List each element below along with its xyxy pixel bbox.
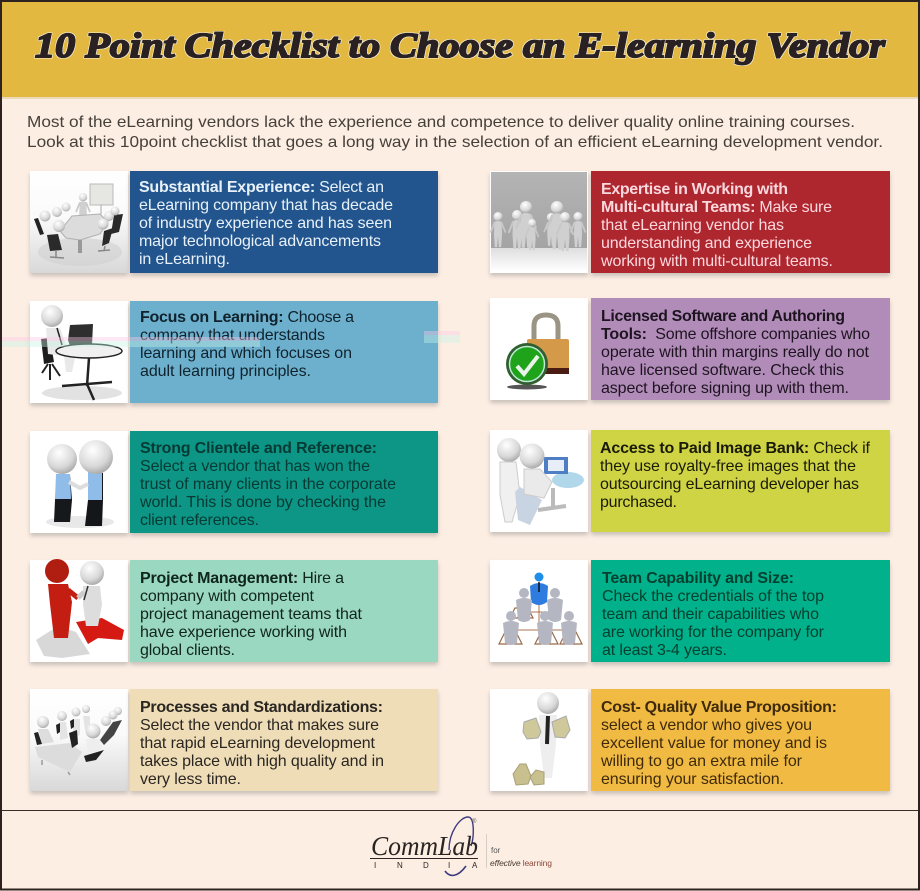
footer logo: I: [374, 861, 376, 870]
panel: team capability: [490, 560, 890, 662]
icon: handshake: [30, 431, 128, 533]
text box: company with competent: [140, 588, 315, 605]
text box: very less time.: [140, 771, 241, 788]
text box: Substantial Experience: Select an: [139, 179, 384, 196]
panel: processes and standardizations: [30, 689, 438, 791]
intro text: Most of the eLearning vendors lack the experience and competence to deliver quality online training courses.: [27, 114, 855, 131]
footer logo: I: [448, 861, 450, 870]
text box: Team Capability and Size:: [602, 570, 794, 587]
text box: Tools: Some offshore companies who: [601, 326, 870, 343]
footer logo: N: [397, 861, 403, 870]
panel: multi-cultural teams: [490, 171, 890, 273]
text box: Strong Clientele and Reference:: [140, 440, 377, 457]
text box: Access to Paid Image Bank: Check if: [600, 440, 871, 457]
intro text: [27, 114, 883, 151]
text box: world. This is done by checking the: [139, 494, 386, 511]
text box: [591, 560, 890, 662]
footer logo: effective learning: [490, 858, 552, 868]
text box: global clients.: [140, 642, 235, 659]
text box: [130, 171, 438, 273]
footer logo: ®: [472, 818, 477, 825]
text box: that rapid eLearning development: [140, 735, 376, 752]
text box: are working for the company for: [602, 624, 825, 641]
text box: [591, 171, 890, 273]
text box: that eLearning vendor has: [601, 217, 784, 234]
header banner: [2, 2, 918, 99]
text box: Expertise in Working with: [601, 181, 788, 198]
footer logo: CommLab: [371, 831, 478, 861]
icon: padlock with check: [490, 298, 588, 400]
panel: licensed software: [490, 298, 890, 400]
text box: takes place with high quality and in: [140, 753, 384, 770]
text box: Licensed Software and Authoring: [601, 308, 845, 325]
panel: project management: [30, 559, 438, 662]
text box: understanding and experience: [601, 235, 812, 252]
icon: org chart: [490, 560, 588, 662]
text box: aspect before signing up with them.: [601, 380, 849, 397]
panel: focus on learning: [30, 301, 438, 403]
text box: Cost- Quality Value Proposition:: [601, 699, 837, 716]
text box: Processes and Standardizations:: [140, 699, 383, 716]
text box: Focus on Learning: Choose a: [140, 309, 354, 326]
text box: have experience working with: [140, 624, 347, 641]
text box: have licensed software. Check this: [601, 362, 844, 379]
text box: [130, 431, 438, 533]
text box: learning and which focuses on: [140, 345, 352, 362]
panel: paid image bank: [490, 430, 890, 532]
text box: in eLearning.: [139, 251, 230, 268]
text box: Select the vendor that makes sure: [140, 717, 379, 734]
text box: [591, 689, 890, 791]
text box: eLearning company that has decade: [139, 197, 393, 214]
text box: trust of many clients in the corporate: [140, 476, 396, 493]
text box: willing to go an extra mile for: [600, 753, 803, 770]
text box: team and their capabilities who: [602, 606, 819, 623]
icon: person at desk: [30, 301, 128, 403]
footer logo: [370, 817, 552, 875]
text box: select a vendor who gives you: [601, 717, 812, 734]
panel: substantial experience: [30, 171, 438, 273]
icon: meeting room: [30, 171, 128, 273]
text box: of industry experience and has seen: [139, 215, 392, 232]
intro text: Look at this 10point checklist that goes a long way in the selection of an efficient eLearning development vendor.: [27, 134, 883, 151]
text box: client references.: [140, 512, 259, 529]
footer logo: D: [423, 861, 429, 870]
footer logo: A: [472, 861, 478, 870]
icon: team at desks: [30, 689, 128, 791]
text box: excellent value for money and is: [601, 735, 827, 752]
title: 10 Point Checklist to Choose an E-learning Vendor: [35, 26, 885, 65]
text box: Check the credentials of the top: [602, 588, 824, 605]
icon: figures at computer: [490, 430, 588, 532]
text box: Multi-cultural Teams: Make sure: [601, 199, 832, 216]
text box: ensuring your satisfaction.: [601, 771, 784, 788]
icon: figure with money bags: [490, 689, 588, 791]
text box: [130, 689, 438, 791]
text box: [591, 430, 890, 532]
icon: group of figures: [490, 171, 588, 273]
text box: [130, 301, 438, 403]
text box: operate with thin margins really do not: [601, 344, 870, 361]
text box: purchased.: [600, 494, 677, 511]
footer logo: for: [491, 846, 501, 855]
text box: Project Management: Hire a: [140, 570, 344, 587]
text box: at least 3-4 years.: [602, 642, 727, 659]
text box: [591, 298, 890, 400]
text box: project management teams that: [140, 606, 363, 623]
text box: [130, 560, 438, 662]
panel: cost quality: [490, 689, 890, 791]
icon: puzzle handshake: [30, 559, 128, 662]
text box: adult learning principles.: [140, 363, 311, 380]
text box: outsourcing eLearning developer has: [600, 476, 859, 493]
text box: they use royalty-free images that the: [600, 458, 856, 475]
text box: Select a vendor that has won the: [140, 458, 370, 475]
text box: working with multi-cultural teams.: [600, 253, 833, 270]
text box: major technological advancements: [139, 233, 381, 250]
panel: strong clientele: [30, 431, 438, 533]
text box: company that understands: [140, 327, 325, 344]
